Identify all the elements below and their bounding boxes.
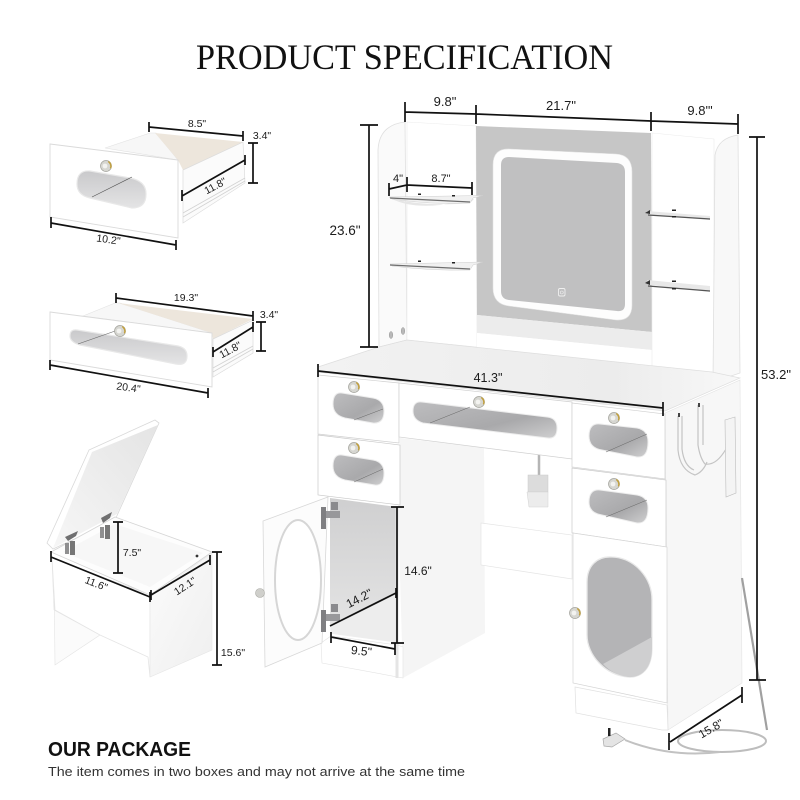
dimension 10.2: [51, 217, 176, 250]
dimension 19.3: [116, 292, 253, 321]
under-desk recess: [484, 448, 572, 535]
wide drawer left wall: [83, 303, 212, 333]
hutch left back panel: [407, 122, 477, 347]
door window: [587, 557, 652, 677]
hanging power device: [527, 455, 548, 507]
stool front: [52, 558, 150, 677]
hinges: [321, 502, 340, 632]
drawer knob: [100, 160, 112, 172]
dimension 14.2: [330, 586, 396, 626]
stool lid underside: [53, 425, 158, 548]
dimension 41.3: 41.3": [474, 371, 502, 385]
dimension 53.2: 53.2": [761, 367, 791, 382]
mirror light ring: [493, 149, 632, 320]
drawer front: [50, 144, 178, 238]
dimension 23.6: 23.6": [329, 223, 361, 238]
left cabinet floor: [330, 593, 397, 643]
wide drawer front: [50, 312, 212, 387]
dimension 14.6: [391, 507, 432, 643]
dimension 8.5: [149, 118, 243, 141]
side hooks: [678, 403, 736, 497]
wide drawer knob: [114, 326, 126, 336]
hutch right back panel: [652, 133, 714, 382]
stool left leg: [52, 560, 100, 665]
dimension 9.5: 9.5": [350, 643, 373, 659]
stool hinge left: [65, 531, 78, 555]
power cable and plug: [603, 578, 767, 754]
dimension 9.8 / 21.7 / 9.8 hutch width: 9.8": [434, 94, 457, 109]
shelf upper left: [389, 194, 483, 206]
open door knob: [256, 588, 264, 598]
vanity hutch: [378, 122, 740, 382]
drawer side: [183, 142, 245, 223]
drawer lower left: [318, 435, 400, 505]
wide drawer interior: [118, 303, 253, 339]
dimension 7.5: 7.5": [123, 547, 141, 559]
dimension 20.4: 20.4": [116, 380, 141, 396]
dimension 10.2: 10.2": [96, 232, 121, 248]
hutch right side panel: [713, 135, 740, 382]
dimension 9.5: [331, 632, 395, 659]
left pedestal side: [398, 438, 485, 678]
mirror touch button: [558, 288, 565, 296]
desk right side: [665, 380, 742, 730]
drawer top left: [318, 375, 399, 443]
shelf upper right: [645, 210, 710, 220]
left cabinet interior: [330, 498, 397, 643]
right glass shelves: [645, 210, 710, 292]
mirror glass: [501, 157, 625, 311]
dimension 15.8: [669, 687, 742, 750]
dimension 11.8: 11.8": [202, 175, 229, 197]
dimension 3.4 wide: [256, 309, 278, 351]
dimension 7.5: [113, 522, 141, 573]
stool right side: [150, 553, 212, 677]
drawer cut-out: [77, 171, 146, 208]
hutch left side panel: [378, 122, 407, 347]
wide drawer cut-out: [70, 330, 187, 364]
drawer interior: [155, 133, 243, 170]
dimension 12.1: [151, 555, 210, 600]
package heading: OUR PACKAGE: [48, 739, 191, 761]
dimension 11.6: 11.6": [83, 574, 109, 594]
shelf lower right: [645, 280, 710, 292]
dimension 14.2: 14.2": [344, 586, 375, 611]
plinth: [575, 687, 668, 730]
dimension 3.4: [248, 130, 271, 183]
stool hinge right: [100, 512, 112, 539]
hutch lower strip: [477, 315, 652, 350]
dimension 9.8 / 21.7 / 9.8 hutch width: [405, 94, 738, 134]
wide drawer side: [213, 320, 253, 377]
left cabinet base: [321, 636, 403, 678]
dimension 11.8 wide: 11.8": [217, 339, 244, 361]
dimension 23.6: [329, 125, 378, 347]
open door: [256, 497, 328, 667]
back support bar: [481, 523, 572, 579]
dimension 9.8 / 21.7 / 9.8 hutch width: 21.7": [546, 98, 576, 113]
dimension 11.8 wide: [213, 322, 253, 361]
dimension 53.2: [749, 137, 791, 680]
dimension 12.1: 12.1": [172, 575, 199, 598]
drawer top right: [572, 403, 665, 479]
drawer lower right: [572, 468, 666, 547]
dimension 20.4: [50, 360, 208, 398]
dimension 3.4 wide: 3.4": [260, 309, 278, 321]
desktop: [318, 340, 740, 411]
dimension 15.6: [212, 552, 245, 665]
hutch grey back panel: [476, 126, 652, 332]
left glass shelves: [389, 194, 483, 270]
dimension 4 and 8.7 shelf: 4": [393, 173, 403, 185]
dimension 41.3: [318, 364, 663, 416]
dimension 9.8 / 21.7 / 9.8 hutch width: 9.8'": [687, 103, 713, 118]
panel: stool: [47, 420, 245, 677]
hutch bolts: [389, 328, 405, 338]
stool lid: [47, 420, 159, 549]
mirror: [493, 149, 632, 320]
dimension 3.4: 3.4": [253, 130, 271, 142]
drawer centre: [399, 383, 572, 459]
drawer left wall: [105, 133, 178, 160]
panel: small drawer: [50, 118, 271, 250]
open door oval: [275, 520, 321, 640]
dimension 11.6: [51, 551, 150, 602]
dimension 8.5: 8.5": [188, 118, 206, 130]
dimension 19.3: 19.3": [174, 292, 198, 304]
shelf lower left: [390, 260, 483, 270]
package note: The item comes in two boxes and may not arrive at the same time: [48, 764, 465, 779]
dimension 11.8: [182, 155, 245, 201]
dimension 15.8: 15.8": [697, 718, 726, 741]
dimension 15.6: 15.6": [221, 647, 245, 659]
left pedestal front edge: [396, 507, 398, 678]
dimension 4 and 8.7 shelf: 8.7": [431, 173, 451, 185]
stool seat box: [51, 517, 212, 595]
dimension 14.6: 14.6": [404, 564, 432, 578]
right cabinet door: [570, 533, 667, 703]
vanity desk: [256, 340, 767, 754]
side socket plate: [725, 417, 736, 497]
dimension 4 and 8.7 shelf: [389, 173, 472, 196]
title: PRODUCT SPECIFICATION: [196, 37, 613, 77]
panel: wide drawer: [50, 292, 278, 398]
